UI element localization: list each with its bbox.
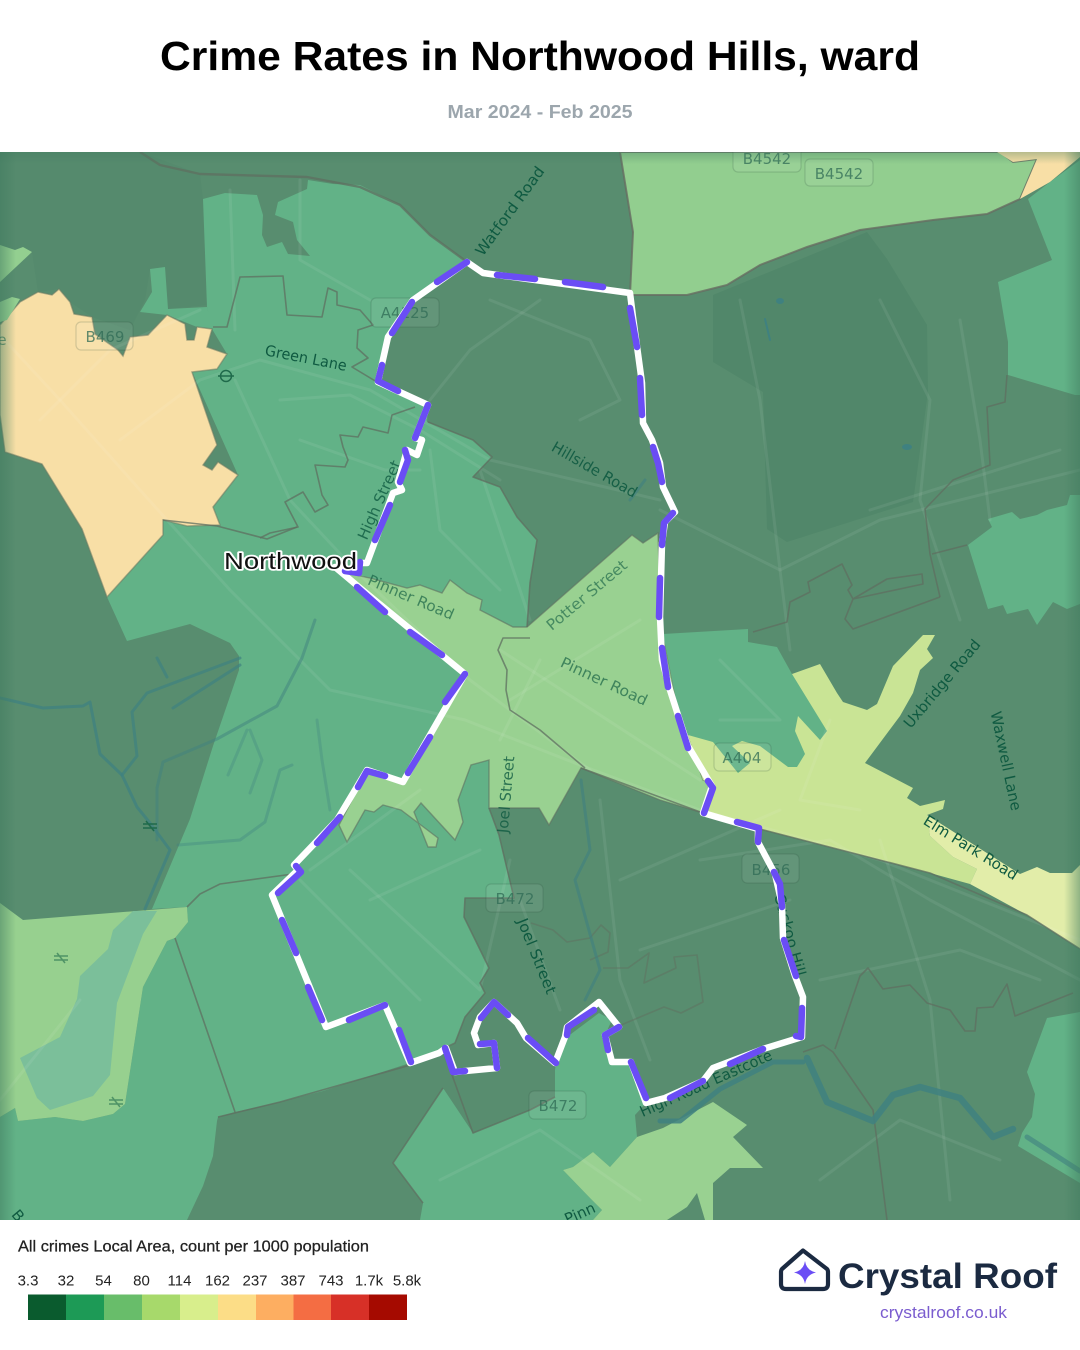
area: medium green east middle (968, 495, 1080, 625)
road shields: B4542 (743, 150, 791, 168)
area: darker eastern park (713, 232, 928, 542)
legend scale values: 1.7k (355, 1272, 384, 1290)
legend scale values: 237 (242, 1272, 268, 1290)
map edge fade (0, 152, 1080, 1220)
road shields: B472 (539, 1097, 577, 1115)
legend scale values: 743 (318, 1272, 344, 1290)
road labels: Watford Road (472, 163, 548, 259)
road labels: Hillside Road (548, 438, 641, 501)
area: lake (20, 911, 157, 1110)
road shields: B469 (86, 328, 124, 346)
legend colour bar (28, 1294, 407, 1320)
road labels: Cuckoo Hill (770, 891, 810, 978)
road labels: Green Lane (263, 341, 348, 375)
area: medium green bump beside cream area (140, 267, 213, 329)
road labels: Elm Park Road (920, 812, 1021, 884)
area: medium green east of ward (663, 629, 827, 773)
road shields: B4542 (815, 165, 863, 183)
road labels: High Street (354, 457, 405, 542)
area: pale yellow along Elm Park Road (927, 815, 1080, 949)
transit icons (54, 370, 234, 1107)
legend scale values (18, 1272, 422, 1290)
area: medium green north-west and west (0, 180, 537, 1220)
legend scale values: 162 (205, 1272, 230, 1290)
legend scale values: 32 (58, 1272, 74, 1290)
road labels: Joel Street (513, 915, 560, 997)
road shields: B472 (496, 890, 534, 908)
logo wordmark: Crystal Roof (838, 1257, 1057, 1296)
road labels: Joel Street (494, 755, 518, 835)
area: medium green east upper (998, 160, 1080, 395)
legend title: All crimes Local Area, count per 1000 population (18, 1238, 369, 1256)
area: yellow-green along A404 (688, 635, 977, 884)
road labels: Potter Street (543, 556, 631, 634)
road network (0, 180, 1080, 1200)
area: cream north-east corner (997, 152, 1080, 199)
area boundaries (140, 152, 1080, 1220)
area: cream high-crime town centre (0, 289, 238, 597)
legend scale values: 387 (280, 1272, 306, 1290)
legend scale values: 54 (95, 1272, 112, 1290)
icon: house with star (781, 1250, 828, 1289)
subtitle: date range: Mar 2024 - Feb 2025 (448, 101, 632, 122)
area: medium green south-east (1018, 1012, 1080, 1183)
road labels: Waxwell Lane (987, 710, 1025, 812)
place label: Northwood: Northwood (224, 548, 357, 574)
website address: crystalroof.co.uk (880, 1304, 1008, 1322)
road shields (76, 145, 873, 1119)
road shields: B456 (752, 861, 790, 879)
legend scale values: 3.3 (18, 1272, 38, 1290)
road labels (0, 163, 1025, 1228)
title: Crime Rates in Northwood Hills, ward (160, 33, 920, 79)
legend scale values: 5.8k (393, 1272, 422, 1290)
road labels: Pinner Road (558, 653, 651, 709)
logo: Crystal Roof (781, 1250, 1057, 1322)
road labels: Pinner Road (365, 571, 457, 624)
road labels: High Road Eastcote (637, 1046, 775, 1121)
area: medium green south centre (393, 1013, 646, 1220)
road labels: Uxbridge Road (900, 636, 984, 732)
area: central light green, Pinner Road and Joel Street (339, 533, 715, 847)
road labels: B (8, 1206, 28, 1226)
streams and rivers (0, 298, 1080, 1171)
legend scale values: 114 (168, 1272, 191, 1290)
road shields: A4125 (381, 304, 429, 322)
legend (18, 1238, 422, 1320)
road shields: A404 (723, 749, 761, 767)
legend scale values: 80 (133, 1272, 150, 1290)
road labels: Pinn (562, 1199, 598, 1228)
area: top-left light patches (0, 245, 32, 322)
area: light green north (620, 152, 1037, 295)
area: light green south (563, 1102, 763, 1220)
ward boundary: white underlay (272, 262, 803, 1103)
ward boundary: purple dashes (278, 262, 802, 1098)
area: light green bottom-left lake park (0, 903, 188, 1121)
area: darker western woodland (0, 152, 208, 330)
